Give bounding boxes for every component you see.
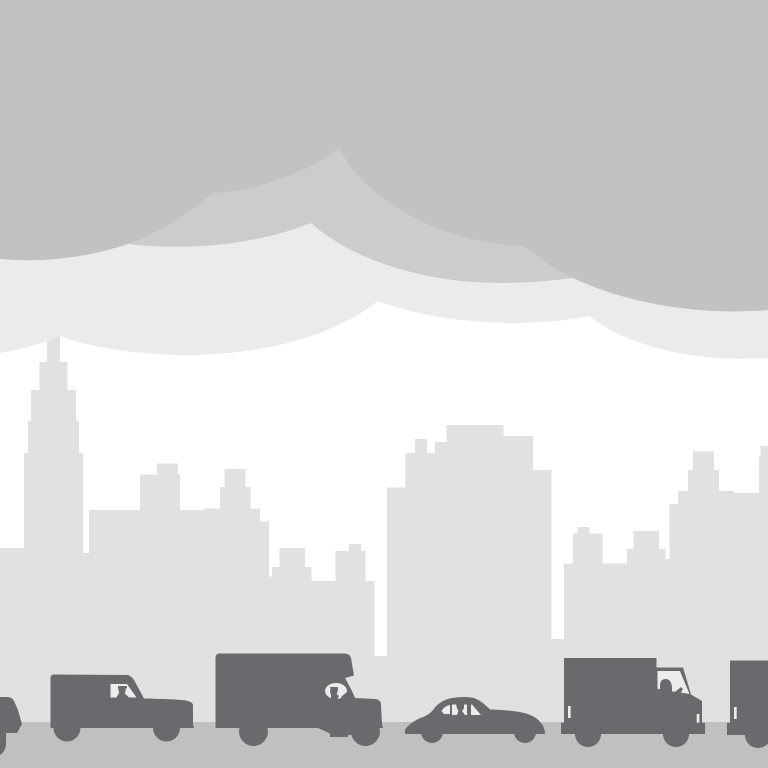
van window with driver [110, 684, 136, 698]
cloud: light outer layer [0, 0, 768, 359]
road [0, 722, 768, 768]
vehicle: van [50, 674, 194, 742]
camper window with driver [325, 683, 347, 700]
vehicle: sedan [405, 697, 545, 743]
cloud: dark top layer [0, 0, 768, 311]
box truck window with driver [658, 671, 690, 694]
right truck light [734, 707, 737, 719]
vehicle: partial car at left edge [0, 697, 22, 755]
sedan windows with driver [442, 704, 481, 715]
box truck lights [568, 706, 699, 723]
vehicle: partial truck at right edge [727, 660, 768, 748]
vehicle: box truck [561, 658, 705, 747]
skyline [0, 330, 768, 730]
cloud: middle layer [100, 100, 600, 283]
vehicle: camper truck [216, 654, 383, 746]
